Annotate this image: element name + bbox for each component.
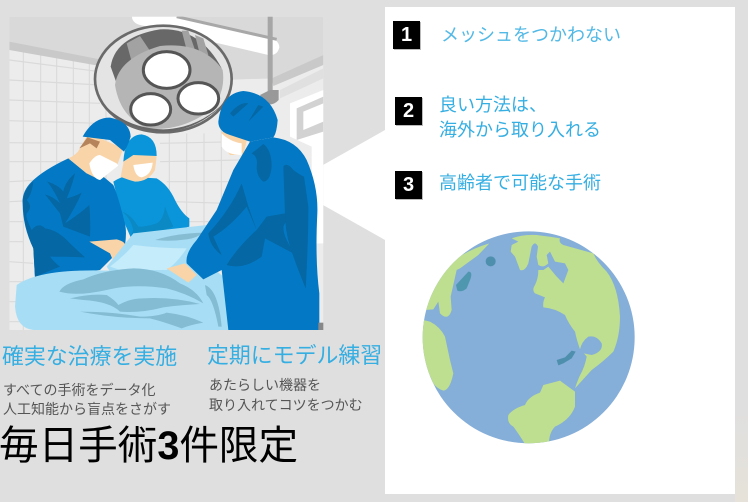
item 2 text <box>439 95 601 140</box>
illustration: surgeons in operating room <box>10 16 324 330</box>
text block: left description <box>3 382 171 417</box>
back surgeon <box>113 134 189 243</box>
text block: right description <box>209 377 363 413</box>
text block: left description: すべての手術をデータ化 <box>3 382 155 398</box>
item 2 text: 良い方法は、 <box>439 95 547 115</box>
drape <box>15 225 230 330</box>
badge: 3 <box>395 171 422 199</box>
globe <box>422 231 635 444</box>
text block: right description: 取り入れてコツをつかむ <box>209 397 363 413</box>
badge: 1: 1 <box>401 24 412 46</box>
hand <box>167 263 197 283</box>
text block: right description: あたらしい機器を <box>209 377 321 393</box>
heading: accurate treatment: 確実な治療を実施 <box>2 344 177 369</box>
badge: 2 <box>395 97 422 125</box>
item 2 text: 海外から取り入れる <box>439 120 601 140</box>
heading: regular model practice: 定期にモデル練習 <box>207 343 382 368</box>
badge: 2: 2 <box>403 100 414 122</box>
panel: white content panel <box>385 7 735 494</box>
surgical lamp <box>95 26 232 132</box>
item 1 text: メッシュをつかわない <box>441 25 621 45</box>
badge: 1 <box>393 21 420 49</box>
right surgeon <box>186 91 319 330</box>
title: 毎日手術3件限定 <box>0 424 298 468</box>
badge: 3: 3 <box>403 174 414 196</box>
background tint at lower right <box>735 410 748 502</box>
text block: left description: 人工知能から盲点をさがす <box>3 401 171 417</box>
left surgeon <box>23 118 131 278</box>
item 3 text: 高齢者で可能な手術 <box>439 173 601 193</box>
